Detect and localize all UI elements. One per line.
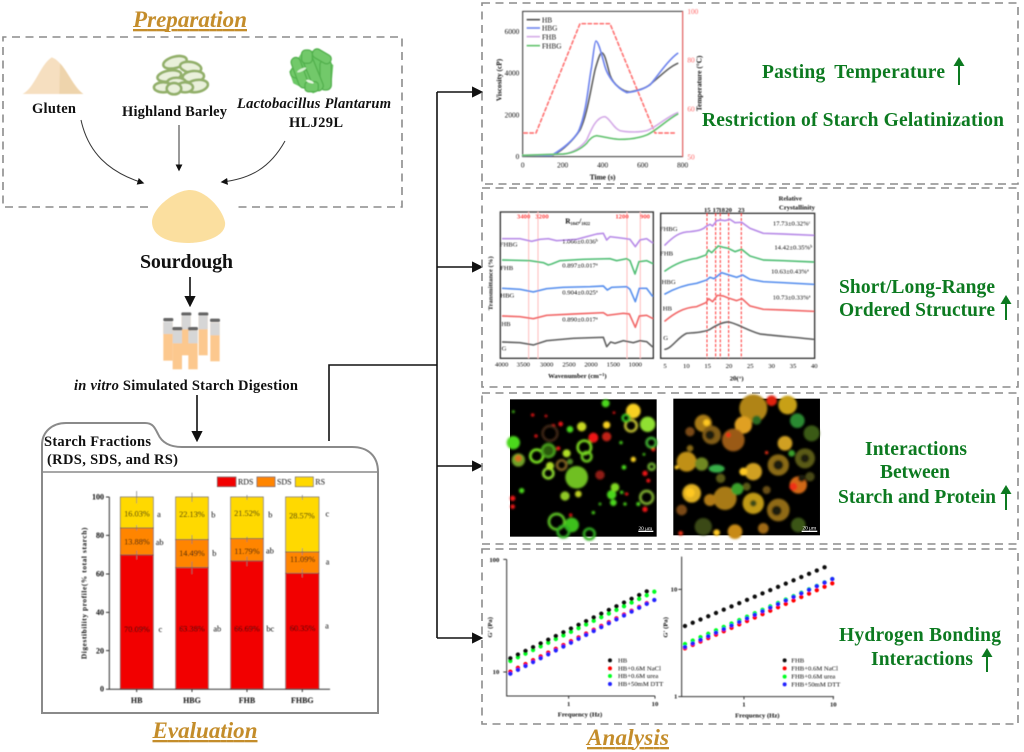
legend: SDS (277, 478, 292, 487)
significance letters: bc (266, 625, 275, 634)
chart: FTIR spectra: 3200 (535, 213, 549, 220)
dashed frame: preparation (3, 37, 402, 207)
heading: interactions between starch and protein: Starch and Protein (838, 487, 996, 508)
value labels: 66.69% (234, 624, 260, 633)
chart: XRD patterns: FHB (660, 251, 674, 258)
scatter chart: FHB rheology: 10 (671, 586, 678, 593)
scatter chart: FHB rheology: 1 (742, 702, 746, 709)
error bars (137, 491, 302, 577)
heading: hydrogen bonding: Hydrogen Bonding (839, 625, 1001, 646)
panel: pasting analysis (482, 3, 1018, 184)
chart: FTIR spectra: 4000 (495, 362, 509, 369)
line chart: viscosity: 6000 (505, 27, 520, 36)
value labels (124, 509, 316, 634)
value labels: 16.03% (124, 510, 150, 519)
chart: XRD patterns: 5 (663, 363, 667, 370)
line chart: viscosity: 50 (687, 152, 695, 161)
panel: structure analysis (482, 188, 1018, 387)
icon: lactobacillus (289, 47, 333, 93)
significance letters: ab (156, 538, 164, 547)
legend: RS (315, 478, 325, 487)
line chart: viscosity: FHBG (542, 41, 562, 50)
chart: XRD patterns: HBG (662, 279, 676, 286)
dashed frame (482, 393, 1018, 544)
heading: restriction of gelatinization: Restriction of Starch Gelatinization (702, 110, 1004, 131)
scatter chart: FHB rheology: FHB+0.6M NaCl (791, 665, 838, 672)
chart: XRD patterns: Relative (779, 196, 802, 203)
line chart: viscosity: 600 (637, 160, 648, 169)
heading: short long range: Short/Long-Range (839, 277, 995, 298)
chart: FTIR spectra: 2500 (562, 362, 576, 369)
chart: XRD patterns: 20 (726, 363, 733, 370)
icon: gluten powder (23, 57, 83, 94)
heading: starch fractions (44, 434, 178, 468)
arrow: lactobacillus to sourdough (222, 141, 285, 182)
line chart: viscosity: 2000 (505, 110, 520, 119)
line chart: viscosity: 400 (597, 160, 608, 169)
chart: FTIR spectra: HB (501, 321, 511, 328)
dashed frame (482, 188, 1018, 387)
label: sourdough: Sourdough (140, 251, 233, 273)
scatter chart: HB rheology: 1 (567, 701, 570, 708)
heading: starch fractions: (RDS, SDS, and RS) (47, 452, 178, 468)
chart: XRD patterns (660, 196, 818, 383)
chart: XRD patterns: 35 (790, 363, 797, 370)
arrow: barley to sourdough (178, 125, 180, 170)
chart: XRD patterns: 17.73±0.32%ᶜ (773, 220, 811, 227)
chart: XRD patterns: 25 (747, 363, 754, 370)
chart: FTIR spectra: 0.897±0.017ᵃ (562, 262, 598, 269)
chart: FTIR spectra: 2000 (584, 362, 598, 369)
icon: sourdough blob (152, 190, 225, 243)
value labels: 21.52% (234, 509, 260, 518)
chart: XRD patterns: 14.42±0.35%ᵇ (774, 244, 812, 251)
significance letters: a (157, 510, 161, 519)
label: highland barley: Highland Barley (122, 104, 228, 120)
scatter chart: FHB rheology: FHB+0.6M urea (791, 674, 835, 681)
panel: preparation (3, 7, 402, 207)
chart: FTIR spectra: 1500 (607, 362, 621, 369)
scatter chart: FHB rheology: G' (Pa) (662, 617, 669, 638)
scatter chart: FHB rheology: 10 (830, 702, 837, 709)
chart: XRD patterns: 40 (811, 363, 818, 370)
chart: FTIR spectra (488, 212, 653, 380)
chart: FTIR spectra: HBG (500, 293, 515, 300)
arrow: sourdough to vials (189, 277, 191, 305)
axes (106, 497, 330, 692)
chart: FTIR spectra: FHBG (500, 242, 518, 249)
line chart: viscosity: Temperature (°C) (695, 55, 704, 111)
line chart: viscosity: HBG (542, 24, 558, 33)
label: lactobacillus plantarum HLJ29L (236, 96, 391, 131)
chart: XRD patterns: 15 (704, 207, 711, 214)
chart: XRD patterns: HB (663, 306, 672, 313)
heading: pasting temperature: Pasting Temperature (762, 62, 945, 83)
line chart: viscosity: Viscosity (cP) (494, 58, 503, 101)
axis labels: 100 (92, 493, 104, 502)
scatter chart: HB rheology: HB+0.6M NaCl (618, 665, 661, 672)
chart: XRD patterns: G (663, 335, 668, 342)
value labels: 11.09% (290, 555, 315, 564)
micrograph: right (673, 394, 820, 539)
chart: XRD patterns: 18 (718, 207, 726, 214)
heading: starch fractions: Starch Fractions (44, 434, 151, 450)
line chart: viscosity: 80 (687, 56, 695, 65)
heading: interactions between starch and protein: Interactions (865, 439, 967, 460)
chart: XRD patterns: 15 (704, 363, 712, 370)
chart: XRD patterns: 17 (713, 207, 720, 214)
scatter chart: FHB rheology: 1 (674, 694, 677, 701)
significance letters: c (325, 510, 329, 519)
scatter chart: HB rheology: G' (Pa) (487, 617, 494, 638)
value labels: 28.57% (289, 511, 315, 520)
folder divider (42, 471, 378, 473)
heading: preparation: Preparation (132, 7, 247, 32)
heading: evaluation: Evaluation (152, 718, 258, 743)
chart: FTIR spectra: 3500 (517, 362, 531, 369)
axis labels: 60 (96, 570, 104, 579)
scatter chart: HB rheology: HB (618, 657, 628, 664)
significance letters: a (326, 557, 330, 566)
chart: FTIR spectra: G (502, 346, 507, 353)
significance letters: ab (213, 624, 221, 633)
heading: interactions between starch and protein (838, 439, 1012, 510)
chart: FTIR spectra: FHB (500, 265, 514, 272)
scatter chart: FHB rheology: FHB (791, 657, 805, 664)
heading: analysis: Analysis (585, 725, 669, 750)
stacked bar chart: digestibility: HBG (183, 696, 201, 705)
chart: XRD patterns: Crystallinity (779, 204, 816, 211)
chart: FTIR spectra: Wavenumber (cm⁻¹) (548, 373, 607, 380)
significance letters: a (325, 622, 329, 631)
line chart: viscosity: Time (s) (590, 172, 616, 181)
line chart: viscosity: 0 (516, 152, 520, 161)
stacked bar chart: digestibility: FHBG (291, 696, 314, 705)
chart: XRD patterns: 10.63±0.43%ᵃ (771, 269, 809, 276)
panel: rheology analysis (482, 549, 1018, 724)
icon: highland barley (154, 54, 209, 94)
chart: FTIR spectra: R₁₀₄₇/₁₀₂₂ (565, 216, 591, 225)
significance letters: b (212, 549, 216, 558)
arrow: gluten to sourdough (81, 120, 143, 183)
scatter chart: HB rheology: HB+0.6M urea (618, 673, 658, 680)
heading: interactions: Interactions (871, 649, 973, 670)
value labels: 70.09% (124, 625, 150, 634)
value labels: 13.88% (124, 538, 150, 547)
line chart: viscosity: 60 (687, 104, 695, 113)
label: in vitro digestion: in vitro Simulated Starch Digestion (74, 378, 298, 394)
stacked bar chart: digestibility: Digestibility profile(% total starch) (80, 527, 89, 659)
chart: FTIR spectra: 0.890±0.017ᵃ (562, 316, 598, 323)
label: lactobacillus plantarum HLJ29L: Lactobacillus Plantarum (236, 96, 391, 112)
value labels: 22.13% (179, 510, 205, 519)
line chart: viscosity: 0 (521, 160, 525, 169)
panel: confocal micrographs (482, 393, 1018, 544)
dashed frame (482, 3, 1018, 184)
chart: FTIR spectra: 900 (640, 213, 651, 220)
line chart: viscosity (494, 7, 704, 181)
panel: starch fractions folder (42, 423, 378, 713)
axis labels: 20 (96, 646, 104, 655)
legend (217, 477, 325, 487)
line chart: viscosity: 4000 (505, 69, 520, 78)
line chart: viscosity: HB (542, 15, 552, 24)
micrograph: left: 20 μm (638, 526, 653, 532)
label: lactobacillus plantarum HLJ29L: HLJ29L (289, 115, 343, 131)
significance letters: ab (266, 547, 274, 556)
chart: XRD patterns: 30 (768, 363, 776, 370)
axis labels: 80 (96, 531, 104, 540)
scatter chart: HB rheology: 100 (489, 557, 500, 564)
bars (120, 497, 319, 689)
axis labels (92, 493, 104, 694)
chart: FTIR spectra: 3000 (540, 362, 554, 369)
stacked bar chart: digestibility: HB (131, 696, 143, 705)
axis labels: 0 (100, 685, 104, 694)
heading: pasting temperature (762, 57, 964, 85)
arrow: digestion to starch fractions (196, 395, 198, 440)
stacked bar chart: digestibility (80, 477, 330, 705)
scatter chart: FHB rheology: FHB+50mM DTT (791, 681, 840, 688)
chart: XRD patterns: 10.73±0.33%ᵃ (773, 294, 811, 301)
value labels: 11.79% (234, 547, 260, 556)
icon: digestion vials (163, 312, 220, 369)
significance letters (156, 510, 330, 634)
heading: ordered structure: Ordered Structure (839, 300, 995, 321)
scatter chart: HB rheology: Frequency (Hz) (558, 712, 602, 719)
scatter chart: FHB rheology (662, 557, 840, 720)
value labels: 63.38% (179, 624, 205, 633)
chart: FTIR spectra: 3400 (517, 213, 531, 220)
legend: RDS (238, 478, 254, 487)
chart: FTIR spectra: Transmittance (%) (488, 256, 495, 310)
scatter chart: HB rheology: 10 (493, 669, 500, 676)
chart: XRD patterns: FHBG (660, 226, 678, 233)
value labels: 14.49% (179, 549, 205, 558)
line chart: viscosity: 100 (687, 7, 699, 16)
chart: XRD patterns: 10 (683, 363, 690, 370)
connector: starch fractions to analysis panels (329, 92, 481, 638)
chart: FTIR spectra: 1000 (629, 362, 643, 369)
scatter chart: HB rheology: HB+50mM DTT (618, 681, 663, 688)
significance letters: b (211, 511, 215, 520)
heading: interactions between starch and protein: Between (880, 462, 950, 483)
chart: FTIR spectra: 1200 (615, 213, 629, 220)
stacked bar chart: digestibility: FHB (239, 696, 256, 705)
significance letters: c (158, 625, 162, 634)
scatter chart: HB rheology (487, 557, 663, 719)
chart: XRD patterns: 2θ(°) (730, 376, 744, 383)
line chart: viscosity: 800 (677, 160, 688, 169)
dashed frame (482, 549, 1018, 724)
label: gluten: Gluten (32, 101, 76, 117)
chart: FTIR spectra: 1.066±0.036ᵇ (562, 238, 598, 245)
chart: FTIR spectra: 0.904±0.025ᵃ (562, 289, 598, 296)
line chart: viscosity: FHB (542, 32, 556, 41)
scatter chart: HB rheology: 10 (652, 701, 659, 708)
axis labels: 40 (96, 608, 104, 617)
significance letters: b (268, 510, 272, 519)
chart: XRD patterns: 23 (738, 207, 745, 214)
micrograph: right: 20 μm (802, 525, 817, 531)
chart: XRD patterns: 20 (725, 207, 733, 214)
folder outline (42, 423, 378, 713)
scatter chart: FHB rheology: Frequency (Hz) (735, 713, 780, 720)
line chart: viscosity: 200 (557, 160, 568, 169)
value labels: 60.35% (290, 624, 316, 633)
micrograph: left (507, 399, 657, 539)
